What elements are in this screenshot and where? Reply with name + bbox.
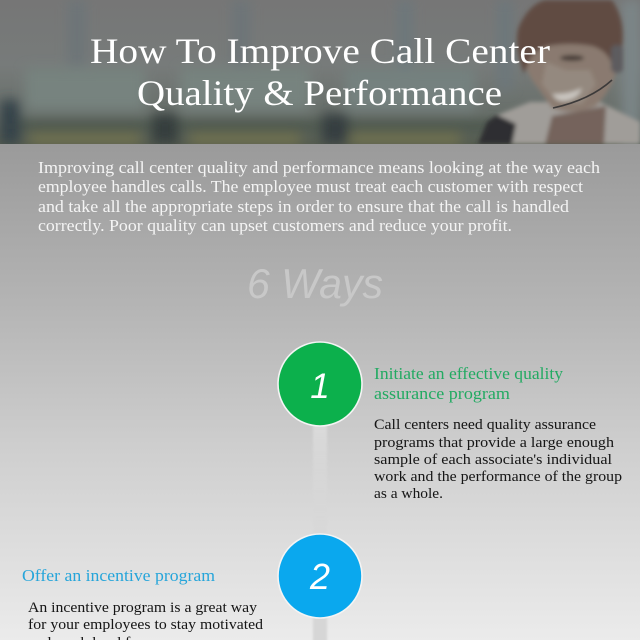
intro paragraph: employee handles calls. The employee must treat each customer with respect: [38, 177, 583, 196]
step 2 body: [28, 600, 264, 640]
step 1 heading: assurance program: [374, 384, 510, 403]
step 2 body: An incentive program is a great way: [28, 600, 258, 616]
intro paragraph: and take all the appropriate steps in order to ensure that the call is handled: [38, 197, 570, 216]
page background: [0, 144, 640, 640]
title: How To Improve Call Center: [90, 31, 550, 71]
step 1 badge: [278, 342, 362, 426]
intro paragraph: Improving call center quality and performance means looking at the way each: [38, 158, 601, 177]
title: Quality & Performance: [137, 73, 502, 113]
step 1 heading: [374, 364, 564, 403]
step 1 body: Call centers need quality assurance: [374, 417, 596, 433]
woman with headset: [478, 0, 640, 144]
step 1 body: programs that provide a large enough: [374, 435, 615, 451]
step 1 badge: 1: [310, 367, 330, 406]
intro paragraph: [38, 158, 601, 235]
step 1 heading: Initiate an effective quality: [374, 364, 564, 383]
step 2 badge: [278, 534, 362, 618]
step 2 body: for your employees to stay motivated: [28, 617, 264, 633]
step 1 body: [374, 417, 622, 502]
intro paragraph: correctly. Poor quality can upset customers and reduce your profit.: [38, 216, 512, 235]
step 1 body: sample of each associate's individual: [374, 452, 612, 468]
step 2 badge: 2: [309, 556, 330, 597]
header banner photo: [0, 0, 640, 144]
connector stem 1: [313, 425, 327, 535]
step 1 body: as a whole.: [374, 486, 443, 502]
headset boom: [553, 80, 612, 108]
step 2 heading: Offer an incentive program: [22, 566, 215, 585]
step 1 body: work and the performance of the group: [374, 469, 622, 485]
heading: 6 Ways: 6 Ways: [247, 260, 383, 307]
title: [90, 31, 550, 113]
connector stem 2: [313, 617, 327, 640]
